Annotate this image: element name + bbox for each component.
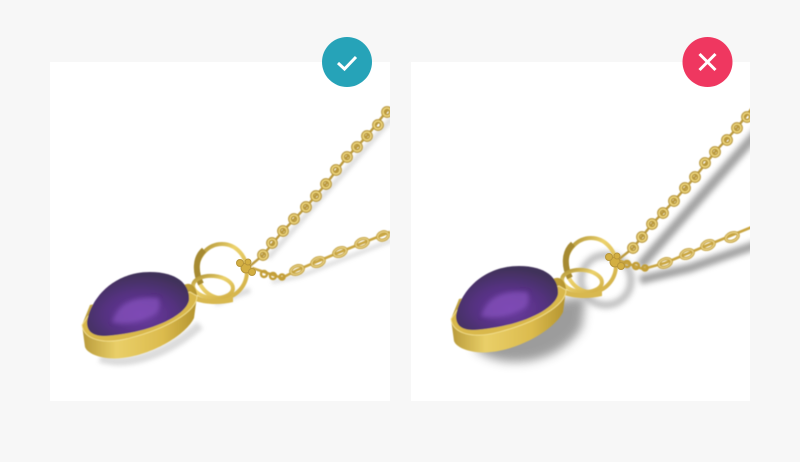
large jump ring [197, 244, 247, 298]
pendant [451, 238, 616, 352]
pendant shadow [474, 296, 586, 362]
bail ring [561, 268, 603, 294]
chain: lower strand [252, 230, 390, 280]
panel: correct example [81, 106, 390, 366]
panel: incorrect example [450, 108, 750, 366]
large jump ring [566, 238, 616, 292]
bezel [82, 284, 197, 358]
pendant [82, 244, 247, 358]
chain: upper strand [618, 108, 752, 260]
amethyst stone [87, 272, 189, 336]
amethyst stone [456, 266, 558, 330]
soft natural shadow [100, 118, 392, 361]
stone inclusion [112, 298, 160, 324]
infographic: correct versus incorrect product shadow comparison [81, 37, 750, 366]
chain: lower strand [612, 227, 752, 271]
bezel [451, 278, 566, 352]
connector clasp [236, 259, 256, 276]
connector clasp [606, 253, 624, 270]
icon: check mark badge [322, 37, 372, 87]
icon: cross badge [682, 37, 732, 87]
bail ring [192, 274, 234, 300]
harsh drop shadow [581, 118, 770, 305]
stone inclusion [481, 292, 529, 318]
chain: upper strand [250, 107, 391, 266]
